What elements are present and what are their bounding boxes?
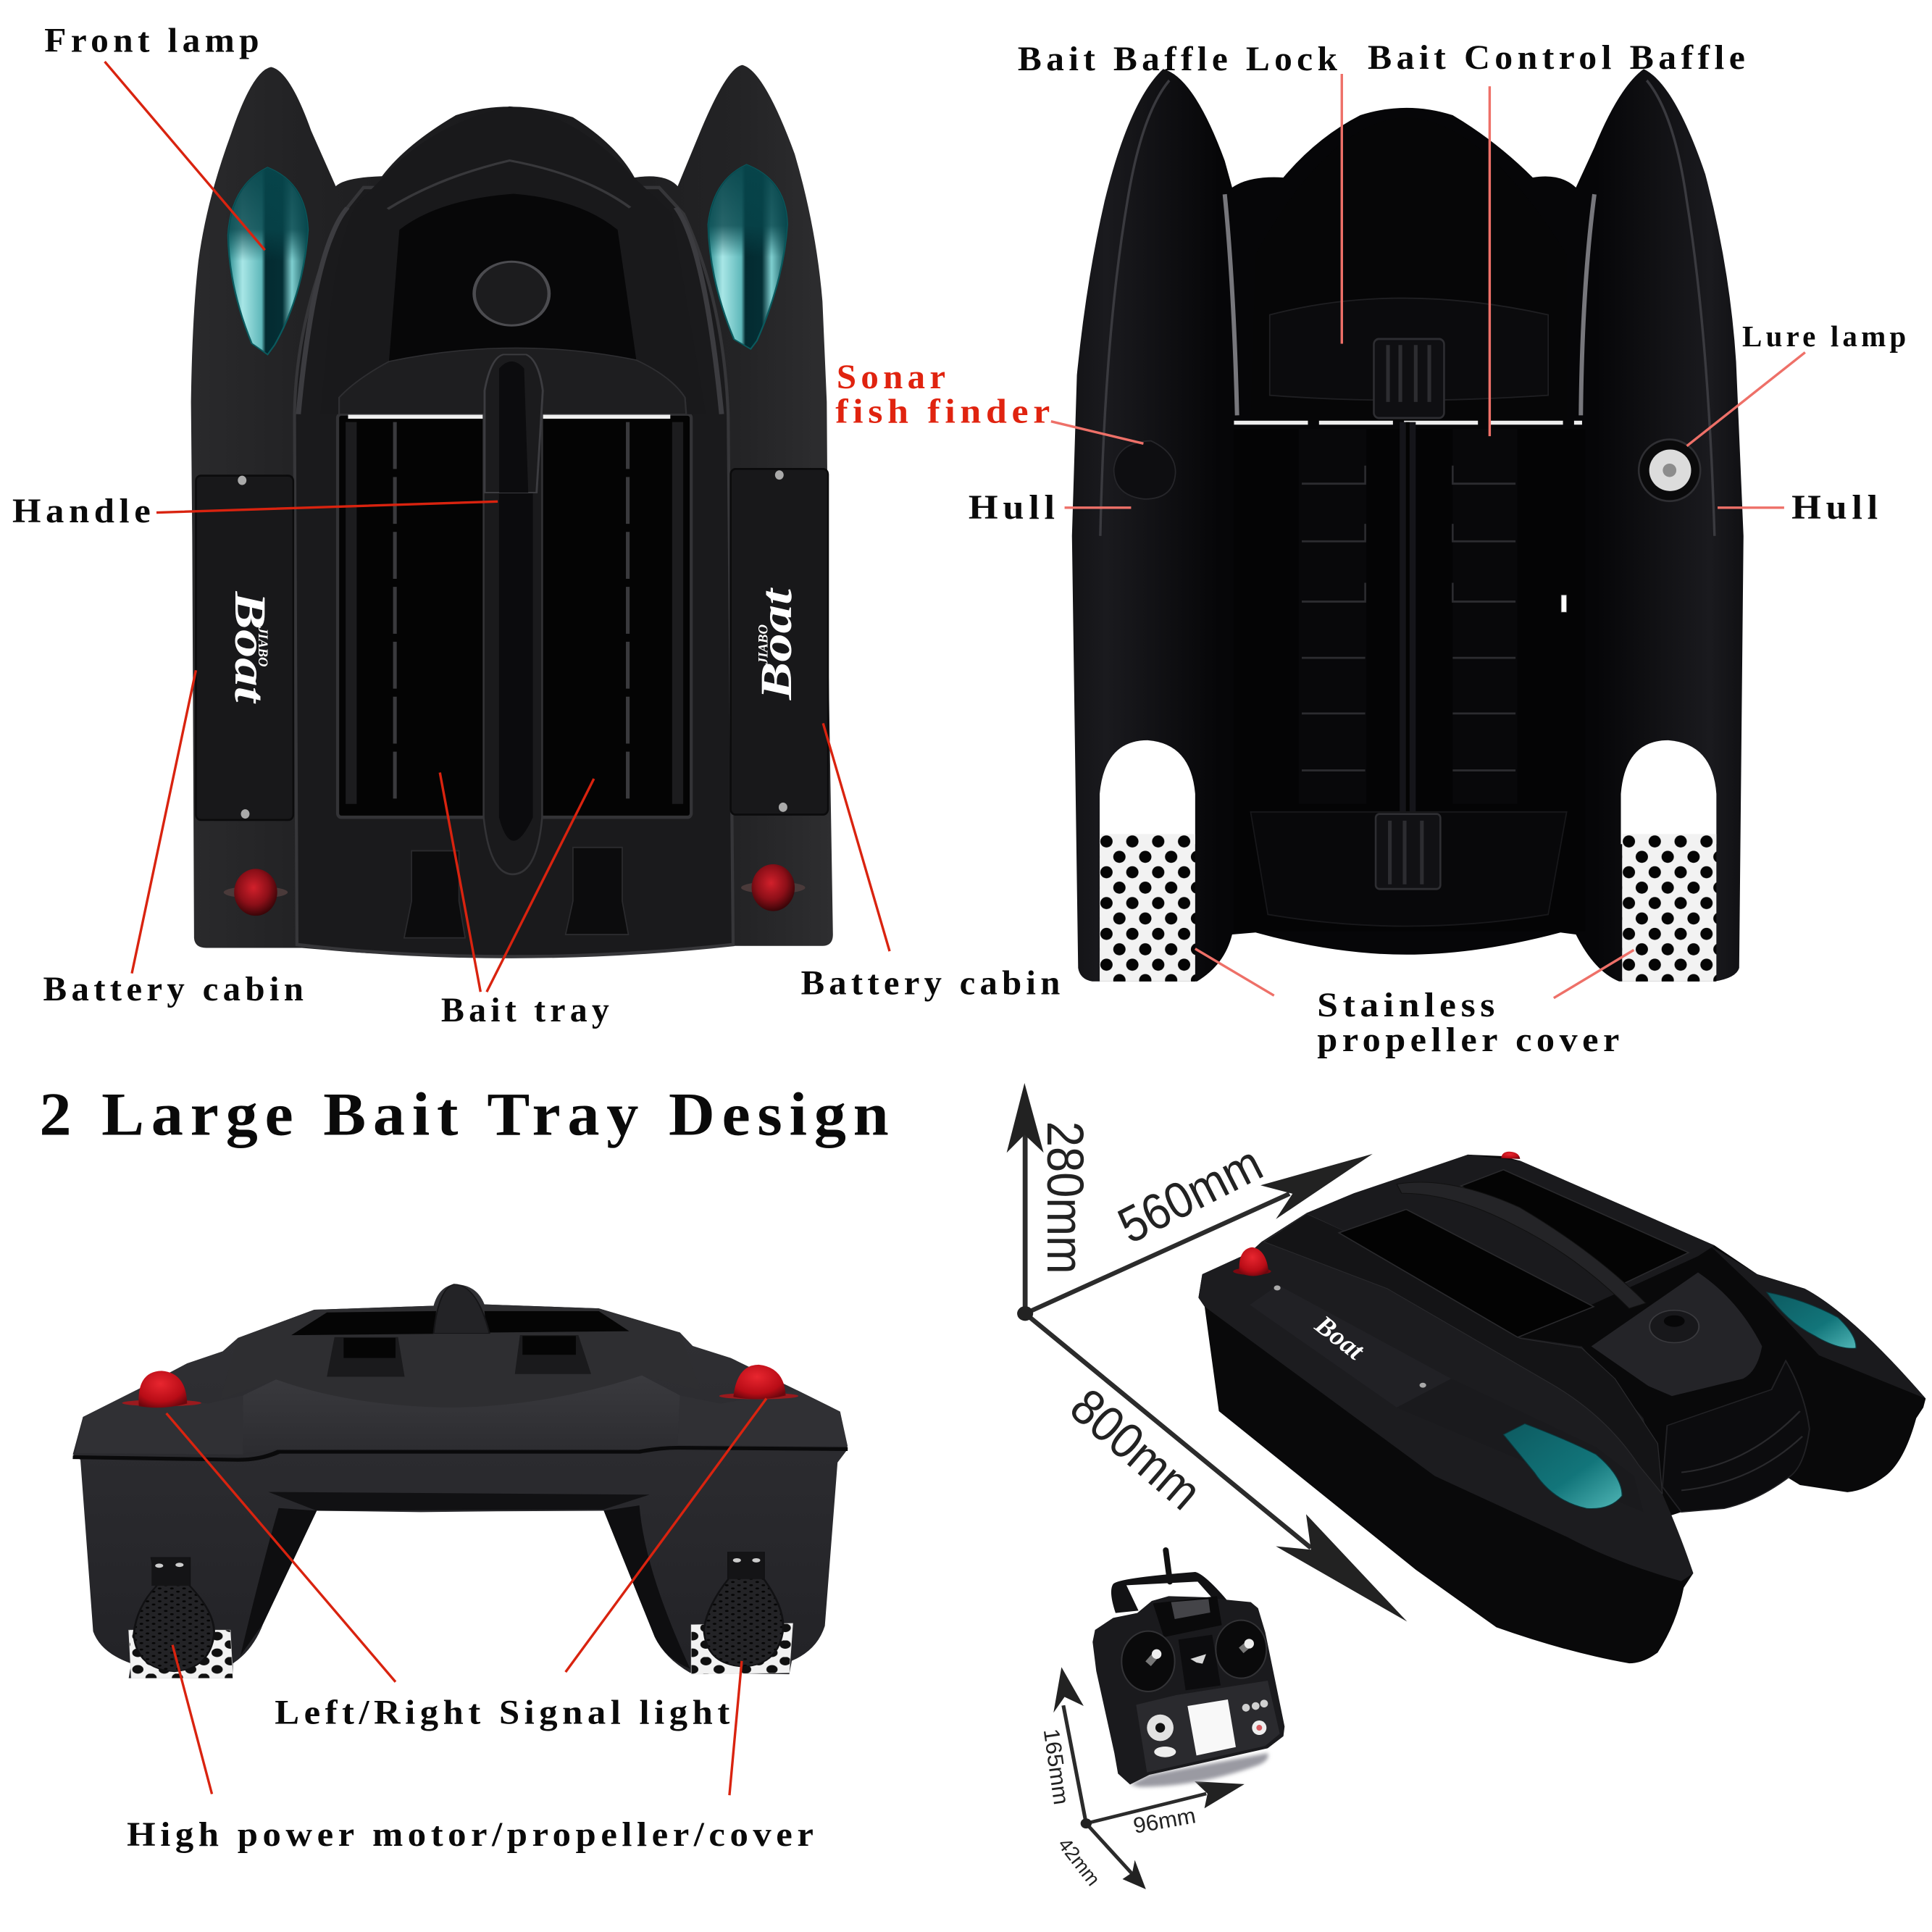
- propeller cover left: [134, 1557, 214, 1671]
- logo right: JIABO: [756, 624, 771, 665]
- sonar hatch: [1114, 441, 1176, 499]
- hull highlights: [1100, 80, 1715, 536]
- hinge left: [151, 1557, 190, 1586]
- battery lid: [1250, 1285, 1451, 1408]
- second hull section: [1397, 1379, 1644, 1512]
- bait tray doors lower: [1234, 422, 1585, 931]
- label: motor propeller cover: High power motor/propeller/cover: [127, 1816, 818, 1854]
- front lamp right: [708, 164, 787, 349]
- buttons: [1242, 1699, 1268, 1712]
- controller body: [1092, 1596, 1284, 1784]
- logo on boat: Boat: [1309, 1310, 1370, 1366]
- lower cowl: [1663, 1360, 1810, 1512]
- bow dome: [320, 106, 706, 414]
- inner hull faces: [241, 1505, 690, 1669]
- logo left: JIABO: [255, 626, 270, 666]
- label: bait baffle lock: Bait Baffle Lock: [1018, 41, 1342, 78]
- origin dot: [1017, 1306, 1033, 1321]
- dimension label 42mm: 42mm: [1054, 1833, 1105, 1890]
- latches: [327, 1335, 591, 1376]
- teal lamp front: [1503, 1423, 1622, 1509]
- boat 3/4 view: [1198, 1152, 1925, 1663]
- underside outline: [1072, 69, 1744, 982]
- lid screws: [1274, 1285, 1426, 1388]
- side decks: [75, 1390, 848, 1455]
- handle arch: [434, 1284, 490, 1334]
- full silhouette: [1198, 1155, 1925, 1663]
- propeller cut-out left: [1100, 740, 1195, 982]
- controller shadow: [1130, 1753, 1268, 1787]
- front panel: [243, 1376, 680, 1453]
- rim line: [72, 1448, 848, 1460]
- knob: [1649, 1310, 1699, 1342]
- label: bait tray: Bait tray: [441, 992, 614, 1029]
- screws: [238, 470, 787, 819]
- white edge strip: [1234, 421, 1582, 425]
- remote controller: [1092, 1550, 1284, 1787]
- propeller cut-out right: [1621, 740, 1716, 982]
- stainless plates: [129, 1630, 233, 1678]
- label: handle: Handle: [12, 493, 155, 530]
- right gimbal: [1216, 1621, 1266, 1678]
- red light rear: [1501, 1152, 1520, 1159]
- screen: [1187, 1699, 1236, 1755]
- label: lure lamp: Lure lamp: [1742, 320, 1910, 353]
- arrowhead up: [1007, 1083, 1044, 1153]
- dimension label 280mm: 280mm: [1036, 1121, 1094, 1274]
- hinge right: [728, 1552, 764, 1579]
- arrowhead down: [1276, 1514, 1407, 1622]
- dimension label 165mm: 165mm: [1039, 1727, 1074, 1806]
- handle: [1397, 1182, 1646, 1308]
- signal light left: [122, 1371, 201, 1408]
- controller axes: [1063, 1705, 1206, 1874]
- bait tray doors upper: [1250, 117, 1567, 422]
- lure lamp: [1639, 440, 1700, 501]
- front lamp left: [228, 167, 308, 354]
- battery cabin lids: [196, 476, 293, 820]
- handle top: [485, 354, 543, 493]
- hatch arch: [339, 348, 686, 414]
- power button: [1252, 1720, 1266, 1735]
- carry handle: [1111, 1572, 1226, 1613]
- red light front: [1233, 1247, 1271, 1276]
- dimension axes: [1025, 1134, 1311, 1548]
- logo right: Boat: [752, 587, 801, 701]
- tray window left: [1339, 1209, 1594, 1337]
- label: sonar fish finder: fish finder: [835, 393, 1055, 430]
- left gimbal: [1121, 1631, 1175, 1691]
- near deck: [1198, 1213, 1693, 1581]
- tray windows: [291, 1311, 630, 1335]
- latches: [404, 850, 465, 938]
- label: sonar fish finder: [835, 359, 1055, 430]
- label: battery cabin left: Battery cabin: [43, 971, 308, 1008]
- title: 2 Large Bait Tray Design: [39, 1081, 896, 1149]
- central raised deck: [295, 188, 733, 957]
- dimension label 560mm: 560mm: [1109, 1134, 1271, 1254]
- bridge underside: [269, 1492, 650, 1510]
- label: battery cabin right: Battery cabin: [801, 965, 1065, 1003]
- controller origin dot: [1081, 1818, 1092, 1828]
- cowl raised lines: [388, 161, 630, 209]
- label: stainless propeller cover: propeller cover: [1317, 1021, 1624, 1059]
- label: signal light: Left/Right Signal light: [275, 1694, 735, 1732]
- stern light left: [224, 869, 288, 916]
- rear body: [72, 1284, 848, 1678]
- handle: [484, 375, 542, 874]
- label: hull right: Hull: [1791, 489, 1883, 527]
- d-pad: [1147, 1715, 1176, 1757]
- centre switch plate: [1179, 1635, 1221, 1690]
- panel: rear view of boat: [72, 1284, 848, 1678]
- label: sonar fish finder: Sonar: [837, 359, 950, 396]
- cowl knob: [474, 262, 549, 325]
- propeller cover right: [704, 1552, 783, 1667]
- teal lamp rear: [1767, 1292, 1856, 1348]
- hull outline: [191, 65, 833, 957]
- lock bracket upper: [1373, 339, 1444, 418]
- label: stainless propeller cover: Stainless: [1317, 987, 1500, 1024]
- top centre block: [1153, 1596, 1222, 1637]
- cowl panel: [1592, 1273, 1762, 1396]
- label: bait control baffle: Bait Control Baffle: [1368, 39, 1749, 77]
- logo left: Boat: [225, 590, 275, 704]
- arrowhead right: [1260, 1154, 1373, 1219]
- stern light right: [741, 864, 806, 911]
- top body: [1307, 1155, 1715, 1337]
- side ridges: [298, 208, 722, 414]
- dimension label 800mm: 800mm: [1060, 1378, 1212, 1521]
- cowl recess: [389, 193, 636, 361]
- bait tray window: [338, 414, 691, 817]
- leader lines: [105, 62, 1805, 1795]
- lower plate: [1136, 1681, 1280, 1773]
- panel: dimensions of boat: [1007, 1083, 1407, 1889]
- tray window right: [1461, 1170, 1689, 1283]
- panel: bottom view of boat: [1072, 69, 1744, 982]
- antenna: [1166, 1550, 1170, 1581]
- controller arrowheads: [1053, 1667, 1245, 1889]
- panel: top view of boat: [191, 65, 833, 957]
- deck spine: [1264, 1213, 1663, 1494]
- label: front lamp: Front lamp: [44, 22, 264, 59]
- signal light right: [719, 1365, 798, 1400]
- rear panel with bracket: [1250, 812, 1567, 927]
- label: hull left: Hull: [969, 489, 1060, 527]
- upper block: [220, 1305, 701, 1408]
- dimension label 96mm: 96mm: [1132, 1803, 1197, 1839]
- label: stainless propeller cover: [1317, 987, 1624, 1059]
- rear hull deck: [1710, 1245, 1925, 1399]
